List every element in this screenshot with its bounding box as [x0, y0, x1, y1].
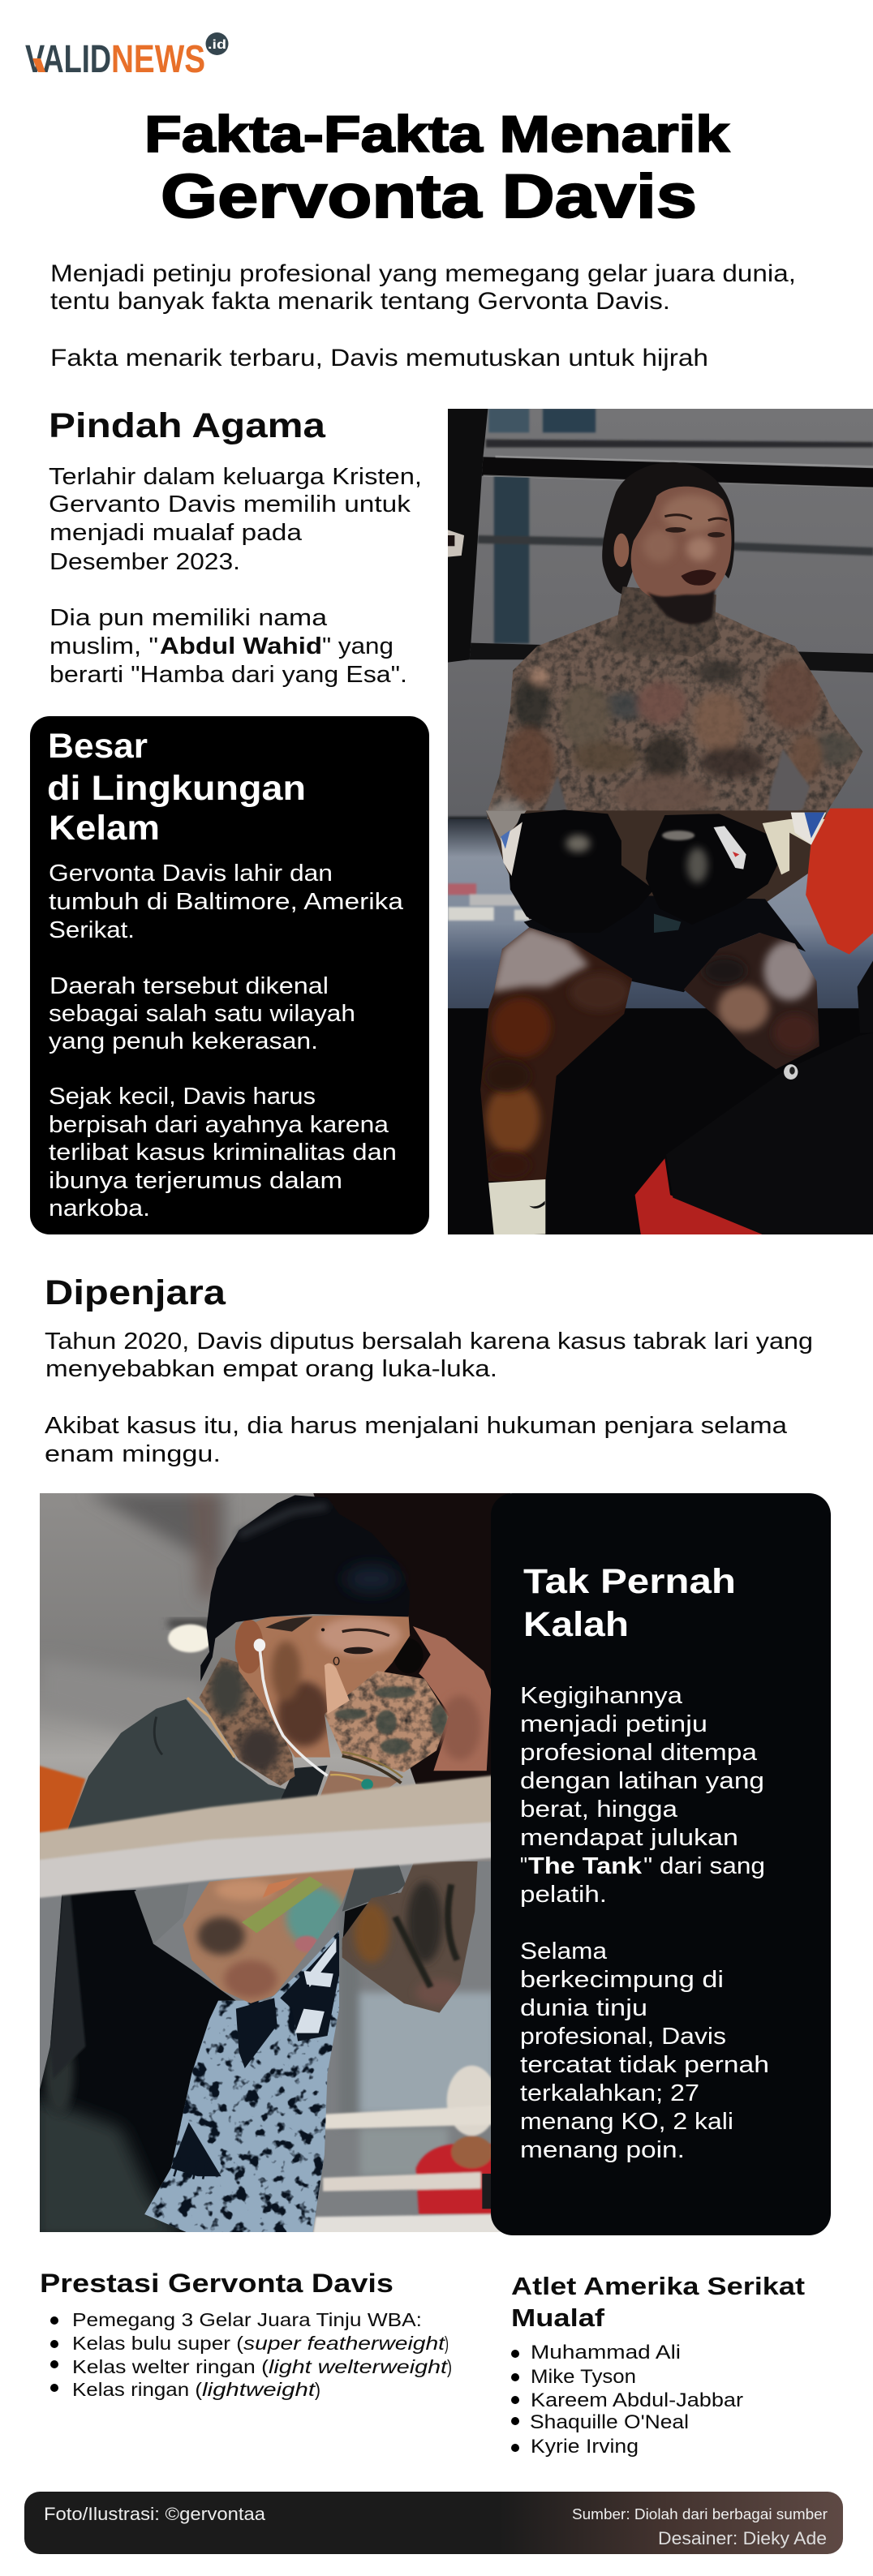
gray sleeve — [135, 1887, 175, 1943]
text block: Besar di Lingkungan Kelam: sebagai salah satu wilayah — [49, 1001, 355, 1027]
text block: Pindah Agama: Abdul Wahid — [160, 633, 322, 659]
durag — [200, 1495, 410, 1681]
text block: Dipenjara: Akibat kasus itu, dia harus menjalani hukuman penjara selama — [45, 1413, 788, 1439]
panel: Tak Pernah Kalah — [491, 1493, 831, 2235]
text block: Dipenjara: Tahun 2020, Davis diputus bersalah karena kasus tabrak lari yang — [45, 1329, 813, 1355]
shirt — [67, 1699, 328, 1835]
lower half of the photo — [448, 809, 873, 1235]
left thigh — [480, 927, 632, 1182]
text block: Tak Pernah Kalah: menang KO, 2 kali — [520, 2109, 733, 2135]
list: achievements: Kelas bulu super ( — [72, 2333, 243, 2354]
heading: Atlet Amerika Serikat Mualaf — [511, 2272, 805, 2332]
text block: Pindah Agama — [49, 464, 422, 688]
text block: Tak Pernah Kalah: profesional ditempa — [520, 1740, 758, 1766]
glasses lens — [393, 1638, 424, 1673]
text block: Tak Pernah Kalah: berat, hingga — [520, 1797, 678, 1823]
palm — [413, 1626, 491, 1771]
left forearm — [183, 1865, 357, 2003]
logo: VALIDNEWS.id: NEWS — [111, 38, 205, 81]
lower belly and forearms behind gloves — [486, 810, 826, 919]
list: achievements: ) — [315, 2379, 320, 2400]
neck — [617, 586, 722, 657]
hair — [602, 462, 734, 595]
logo: VALIDNEWS.id: .id — [208, 38, 226, 52]
heading: Atlet Amerika Serikat Mualaf: Mualaf — [511, 2303, 605, 2332]
text block: Tak Pernah Kalah: dengan latihan yang — [520, 1768, 764, 1794]
text block: Tak Pernah Kalah: menang poin. — [520, 2137, 685, 2163]
text block: Tak Pernah Kalah: Selama — [520, 1938, 608, 1964]
list: achievements: ) — [445, 2333, 449, 2354]
gloves — [510, 809, 652, 920]
text block: Pindah Agama: " yang — [322, 633, 393, 659]
text block: Tak Pernah Kalah: The Tank — [528, 1853, 643, 1879]
text block: Besar di Lingkungan Kelam: Gervonta Davis lahir dan — [49, 861, 333, 887]
heading: Atlet Amerika Serikat Mualaf: Atlet Amerika Serikat — [511, 2272, 805, 2300]
footer bar — [24, 2492, 843, 2554]
text block: Tak Pernah Kalah: pelatih. — [520, 1882, 607, 1908]
heading: Tak Pernah Kalah: Tak Pernah — [523, 1562, 736, 1601]
logo: VALIDNEWS.id — [25, 32, 229, 81]
photo: Gervonta Davis seated shirtless with gloves — [448, 408, 873, 1235]
list: Muslim convert athletes: Kyrie Irving — [531, 2436, 639, 2458]
heading: Besar di Lingkungan Kelam: di Lingkungan — [47, 769, 306, 808]
text block: Pindah Agama: Desember 2023. — [49, 549, 240, 575]
face — [236, 1614, 410, 1758]
heading: Besar di Lingkungan Kelam: Besar — [48, 727, 148, 766]
panel: Besar di Lingkungan Kelam — [30, 716, 429, 1234]
text block: Pindah Agama: berarti "Hamba dari yang Esa". — [49, 662, 407, 688]
list: Muslim convert athletes: Muhammad Ali — [531, 2342, 681, 2363]
text block: Tak Pernah Kalah — [520, 1683, 769, 2163]
text block: Besar di Lingkungan Kelam: yang penuh kekerasan. — [49, 1028, 318, 1054]
right sleeve — [342, 1863, 406, 1912]
list: achievements — [50, 2309, 452, 2400]
text block: Besar di Lingkungan Kelam: berpisah dari ayahnya karena — [49, 1112, 389, 1138]
text block: Besar di Lingkungan Kelam: terlibat kasus kriminalitas dan — [49, 1140, 397, 1166]
text block: Tak Pernah Kalah: tercatat tidak pernah — [520, 2052, 769, 2078]
text block: Dipenjara: menyebabkan empat orang luka-luka. — [45, 1356, 497, 1382]
list: achievements: Pemegang 3 Gelar Juara Tinju WBA: — [72, 2309, 422, 2330]
text block: Besar di Lingkungan Kelam: Daerah tersebut dikenal — [49, 973, 329, 999]
photo credit: Foto/Ilustrasi: ©gervontaa — [44, 2504, 266, 2524]
lower part of the photo — [40, 1861, 501, 2232]
heading: Tak Pernah Kalah: Kalah — [523, 1605, 629, 1644]
source credit: Sumber: Diolah dari berbagai sumber — [572, 2506, 828, 2522]
text block: Pindah Agama: muslim, " — [49, 633, 158, 659]
text block: Besar di Lingkungan Kelam — [49, 861, 404, 1221]
red sleeve — [806, 809, 873, 955]
text block: Besar di Lingkungan Kelam: narkoba. — [49, 1196, 150, 1221]
photo: Gervonta Davis in durag with earphones — [32, 1491, 540, 2241]
list: Muslim convert athletes — [511, 2342, 743, 2458]
text block: Tak Pernah Kalah: " dari sang — [643, 1853, 765, 1879]
text block: Pindah Agama: Gervanto Davis memilih untuk — [49, 492, 411, 517]
list: achievements: Kelas ringan ( — [72, 2379, 202, 2400]
upper half of the photo — [448, 408, 873, 833]
text block: Tak Pernah Kalah: Kegigihannya — [520, 1683, 683, 1709]
intro text: Fakta menarik terbaru, Davis memutuskan untuk hijrah — [50, 345, 708, 371]
upper part of the photo — [38, 1491, 540, 1898]
torso — [486, 611, 862, 830]
title: Fakta-Fakta Menarik — [144, 106, 730, 163]
heading: Pindah Agama: Pindah Agama — [49, 406, 326, 445]
text block: Besar di Lingkungan Kelam: ibunya terjerumus dalam — [49, 1168, 342, 1194]
neck — [199, 1657, 295, 1786]
trainer black shirt — [673, 1196, 763, 1234]
list: achievements: lightweight — [202, 2379, 316, 2400]
list: Muslim convert athletes: Kareem Abdul-Jabbar — [531, 2389, 743, 2411]
text block: Pindah Agama: Terlahir dalam keluarga Kristen, — [49, 464, 422, 490]
face — [631, 487, 732, 607]
heading: Besar di Lingkungan Kelam: Kelam — [49, 809, 160, 848]
intro text — [50, 260, 796, 371]
text block: Tak Pernah Kalah: " — [520, 1853, 527, 1879]
dark shirt — [38, 1890, 236, 2233]
ear — [235, 1620, 264, 1673]
title — [144, 106, 730, 231]
hand with tattoos — [325, 1671, 449, 1772]
ring rope — [38, 1771, 534, 1898]
shorts — [524, 895, 806, 992]
earphone cable — [260, 1646, 328, 1775]
right thigh — [684, 933, 819, 1069]
text block: Dipenjara — [45, 1329, 813, 1467]
wrist and bracelets — [319, 1771, 401, 1801]
text block: Tak Pernah Kalah: profesional, Davis — [520, 2024, 726, 2050]
list: Muslim convert athletes: Shaquille O'Neal — [530, 2411, 689, 2433]
text block: Pindah Agama: menjadi mualaf pada — [49, 520, 303, 546]
intro text: Menjadi petinju profesional yang memegang gelar juara dunia, — [50, 260, 796, 287]
list: achievements: light welterweight — [269, 2356, 449, 2377]
text block: Tak Pernah Kalah: dunia tinju — [520, 1995, 647, 2021]
text block: Tak Pernah Kalah: terkalahkan; 27 — [520, 2080, 699, 2106]
list: achievements: super featherweight — [243, 2333, 446, 2354]
text block: Besar di Lingkungan Kelam: tumbuh di Baltimore, Amerika — [49, 889, 404, 915]
heading: Tak Pernah Kalah — [523, 1562, 736, 1644]
logo: VALIDNEWS.id: VALID — [25, 38, 111, 81]
text block: Besar di Lingkungan Kelam: Serikat. — [49, 917, 135, 943]
text block: Tak Pernah Kalah: berkecimpung di — [520, 1967, 724, 1993]
heading: Dipenjara: Dipenjara — [45, 1273, 226, 1312]
gaps between arms and torso — [768, 749, 810, 811]
intro text: tentu banyak fakta menarik tentang Gervonta Davis. — [50, 288, 670, 315]
list: achievements: ) — [447, 2356, 452, 2377]
text block: Tak Pernah Kalah: menjadi petinju — [520, 1711, 707, 1737]
necklace — [187, 1698, 234, 1758]
beard — [647, 590, 715, 625]
list: Muslim convert athletes: Mike Tyson — [531, 2366, 636, 2388]
text block: Tak Pernah Kalah: mendapat julukan — [520, 1825, 738, 1851]
text block: Pindah Agama: Dia pun memiliki nama — [49, 605, 328, 631]
title: Gervonta Davis — [161, 162, 697, 231]
right forearm — [342, 1857, 478, 2013]
trainer red panel — [635, 1158, 765, 1235]
shirt graphic — [144, 1930, 339, 2233]
text block: Besar di Lingkungan Kelam: Sejak kecil, Davis harus — [49, 1084, 316, 1110]
torso shading — [488, 622, 858, 833]
heading: Prestasi Gervonta Davis: Prestasi Gervonta Davis — [40, 2269, 393, 2298]
sock — [488, 1179, 545, 1235]
text block: Dipenjara: enam minggu. — [45, 1441, 221, 1467]
heading: Besar di Lingkungan Kelam — [47, 727, 306, 848]
designer credit: Desainer: Dieky Ade — [658, 2528, 827, 2548]
list: achievements: Kelas welter ringan ( — [72, 2356, 269, 2377]
